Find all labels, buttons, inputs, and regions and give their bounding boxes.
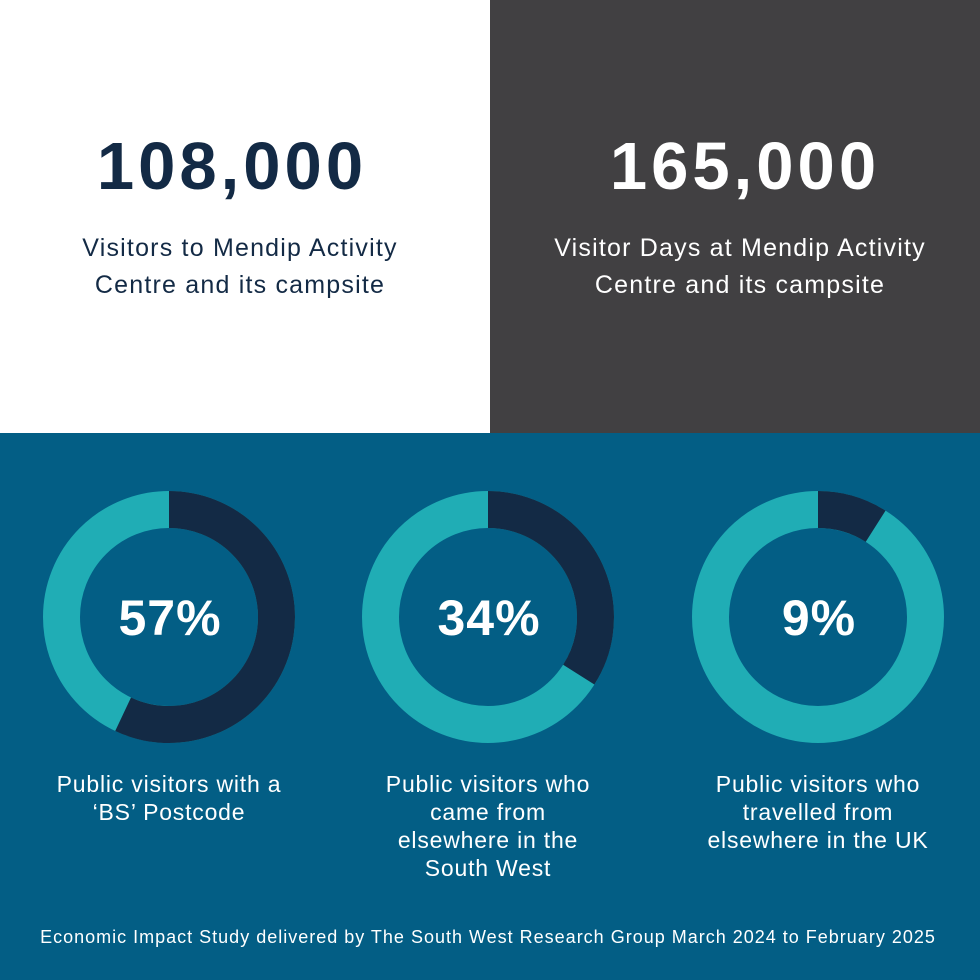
label: South West: [386, 771, 590, 881]
label: South West: came from: [430, 799, 546, 825]
panel: visitor origins: [0, 433, 980, 980]
label: BS postcode: Public visitors with a: [57, 771, 281, 797]
percent labels: 34%: [437, 590, 541, 646]
label: UK: travelled from: [743, 799, 893, 825]
donut: 57%: [62, 510, 276, 724]
panel: visitors: [0, 0, 490, 433]
donut charts: [43, 491, 944, 743]
donut: 9%: [710, 510, 926, 724]
label: UK: Public visitors who: [716, 771, 920, 797]
panel: visitor days: [490, 0, 980, 433]
label: South West: elsewhere in the: [398, 827, 578, 853]
label: visitor days: [554, 234, 926, 299]
label: South West: Public visitors who: [386, 771, 590, 797]
label: BS postcode: [57, 771, 281, 825]
donut: 34%: [380, 510, 596, 724]
label: visitors: Visitors to Mendip Activity: [82, 234, 398, 262]
label: South West: South West: [425, 855, 551, 881]
label: BS postcode: ‘BS’ Postcode: [93, 799, 245, 825]
label: UK: [707, 771, 929, 853]
label: visitors: [82, 234, 398, 299]
percent labels: [118, 590, 856, 646]
percent labels: 57%: [118, 590, 222, 646]
footer caption: Economic Impact Study delivered by The South West Research Group March 2024 to February 2025: [40, 927, 936, 947]
number: 108,000: 108,000: [97, 129, 367, 204]
label: visitors: Centre and its campsite: [95, 271, 385, 299]
label: visitor days: Centre and its campsite: [595, 271, 885, 299]
label: UK: elsewhere in the UK: [707, 827, 929, 853]
number: 165,000: 165,000: [610, 129, 880, 204]
percent labels: 9%: [782, 590, 856, 646]
label: visitor days: Visitor Days at Mendip Activity: [554, 234, 926, 262]
